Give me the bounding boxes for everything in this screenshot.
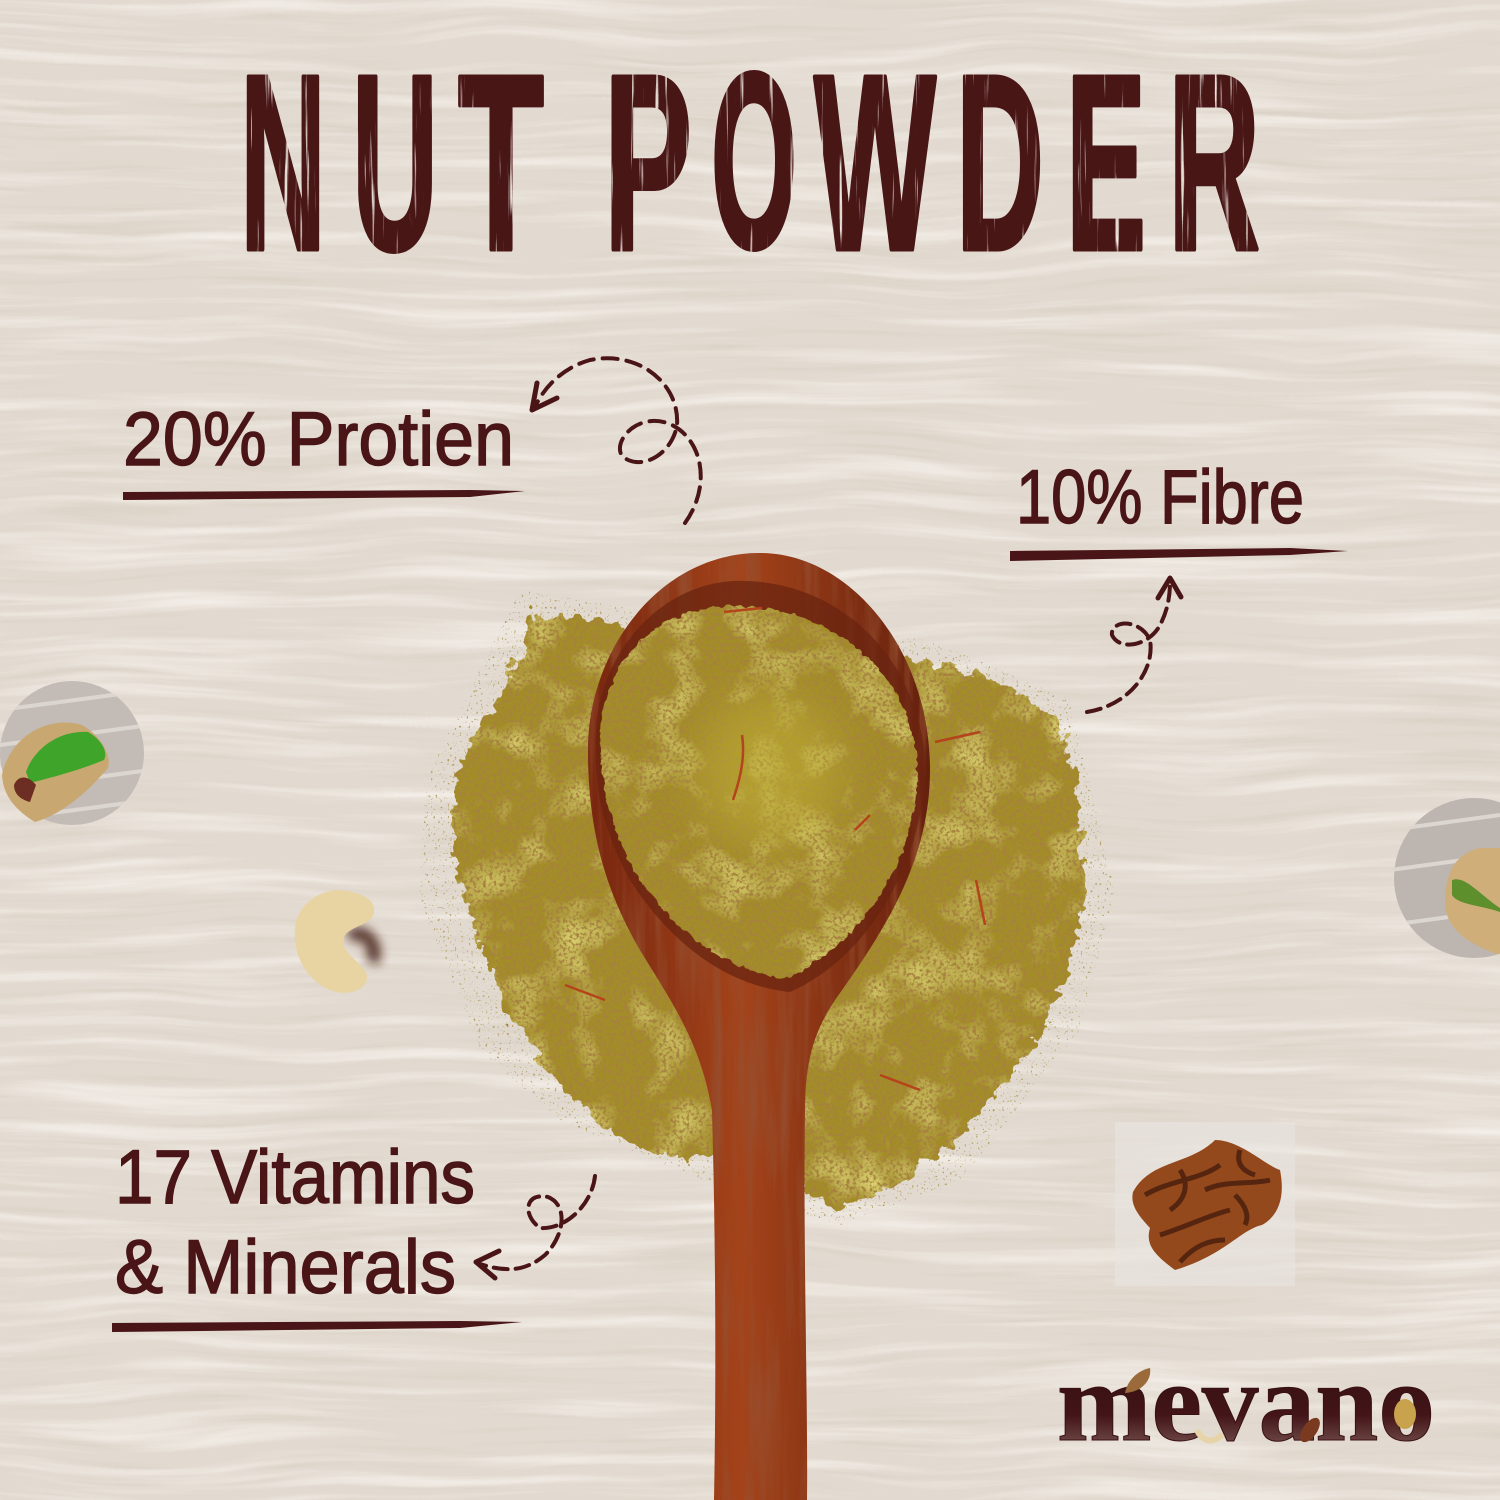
icon: pistachio left xyxy=(0,680,150,830)
arrow: to 20% Protien xyxy=(532,358,701,523)
label: 10% Fibre: 10% Fibre xyxy=(1016,455,1304,540)
walnut backdrop xyxy=(1115,1122,1295,1286)
title: W xyxy=(814,23,936,302)
title: O xyxy=(711,21,797,300)
powder dust xyxy=(420,590,1115,1225)
powder mound xyxy=(453,612,1086,1208)
wooden spoon xyxy=(565,553,985,1500)
title: R xyxy=(1168,23,1260,302)
title: N xyxy=(240,23,326,302)
icon: seed in logo o xyxy=(1394,1399,1416,1429)
spoon grain xyxy=(588,553,930,1500)
underline xyxy=(123,490,525,500)
powder in spoon xyxy=(600,606,917,978)
title: T xyxy=(458,23,544,302)
icon: cashew xyxy=(295,890,374,993)
label: & Minerals: & Minerals xyxy=(115,1225,456,1310)
bowl inner shadow xyxy=(595,581,925,992)
icon: almond on logo xyxy=(1125,1368,1150,1393)
label: 17 Vitamins: 17 Vitamins xyxy=(115,1135,475,1220)
underline xyxy=(112,1321,522,1332)
cashew body xyxy=(295,890,374,993)
title: D xyxy=(956,23,1044,302)
label: 20% Protien: 20% Protien xyxy=(123,397,514,482)
icon: cashew on logo xyxy=(1197,1430,1222,1440)
arrow: to Vitamins & Minerals xyxy=(476,1176,595,1278)
walnut creases xyxy=(1145,1150,1270,1262)
title: P xyxy=(604,23,692,302)
title xyxy=(240,21,1260,302)
callout: 17 Vitamins & Minerals xyxy=(112,1135,522,1332)
powder pile xyxy=(420,590,1115,1225)
cashew shadow xyxy=(350,934,374,962)
icon: walnut xyxy=(1115,1122,1295,1286)
walnut body xyxy=(1132,1140,1282,1270)
callout: 20% Protien xyxy=(123,397,525,500)
icon: nut on logo xyxy=(1296,1415,1324,1445)
saffron strands xyxy=(565,608,985,1090)
spoon handle and bowl xyxy=(588,553,930,1500)
callout: 10% Fibre xyxy=(1010,455,1348,561)
underline xyxy=(1010,548,1348,561)
title: E xyxy=(1066,23,1146,302)
icon: pistachio right xyxy=(1390,795,1500,965)
logo: mevano: mevano xyxy=(1057,1341,1435,1465)
arrow: to 10% Fibre xyxy=(1087,578,1181,712)
title: U xyxy=(352,23,438,302)
powder highlight xyxy=(700,695,840,845)
